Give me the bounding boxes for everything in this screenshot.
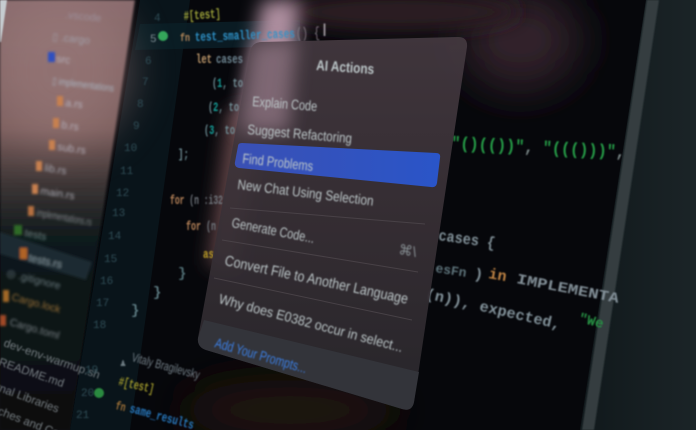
code editor text: } <box>131 303 139 319</box>
line numbers: 11 <box>120 166 134 178</box>
AI Actions popup menu: Add Your Prompts... <box>213 335 309 376</box>
line numbers <box>76 13 161 422</box>
file tree sidebar: ◎ .gitignore <box>5 267 62 292</box>
line numbers: 5 <box>150 34 157 46</box>
line numbers: 15 <box>104 254 117 266</box>
file tree sidebar: sub.rs <box>57 141 87 157</box>
code editor text: "We <box>577 311 605 333</box>
sidebar lower file names <box>0 337 101 430</box>
code editor text: } <box>153 285 161 301</box>
code editor text: fn <box>180 33 190 45</box>
file tree sidebar: tests <box>23 227 47 243</box>
code editor text: as <box>203 247 214 262</box>
code editor text: } <box>178 266 186 282</box>
code editor text: cases <box>216 52 243 67</box>
file tree sidebar: b.rs <box>61 119 80 133</box>
code editor text: esFn ) <box>434 260 484 284</box>
highlighted row <box>235 143 440 187</box>
menu items: Explain Code <box>252 93 318 114</box>
AI Actions popup menu: ⌘\ <box>398 241 418 260</box>
file tree sidebar: main.rs <box>40 185 75 202</box>
menu panel <box>198 37 467 410</box>
code editor text: #[test] <box>117 374 156 397</box>
line numbers: 10 <box>124 143 137 155</box>
code editor text: ♟ <box>120 359 126 370</box>
AI Actions popup menu: Why does E0382 occur in select... <box>217 291 405 355</box>
code editor text: fn <box>114 399 127 415</box>
AI Actions popup menu: Suggest Refactoring <box>247 121 353 146</box>
line numbers: 12 <box>116 188 129 200</box>
code editor text: let <box>196 52 212 67</box>
code editor text: (1, to <box>212 76 243 91</box>
code editor text: Vitaly Bragilevsky <box>130 350 202 382</box>
code editor text: Ⅰ <box>322 23 327 42</box>
menu footer band <box>198 320 419 410</box>
file tree sidebar: lib.rs <box>44 162 67 177</box>
line numbers: 9 <box>133 121 140 133</box>
file tree sidebar: .vscode <box>65 9 102 25</box>
code editor text: test_smaller_cases <box>195 27 295 45</box>
line numbers: 21 <box>76 410 90 422</box>
line numbers: 7 <box>142 77 149 89</box>
file tree sidebar: implementations.rs <box>35 207 93 229</box>
file tree sidebar: src <box>56 53 71 67</box>
line numbers: 16 <box>100 276 113 288</box>
file tree sidebar: ▯ .cargo <box>52 31 91 47</box>
code editor text: in <box>487 266 508 286</box>
code editor text: #[test] <box>183 6 221 24</box>
code editor text: for (n <box>186 219 216 234</box>
file tree sidebar: ▯ implementations <box>52 76 115 95</box>
AI Actions popup menu: Generate Code... <box>230 214 316 246</box>
line numbers: 6 <box>145 56 152 68</box>
line numbers: 19 <box>85 365 98 377</box>
AI Actions popup menu: Find Problems <box>242 150 314 174</box>
AI Actions popup menu: Convert File to Another Language <box>223 253 409 308</box>
file tree sidebar <box>0 9 115 342</box>
file tree sidebar: Cargo.lock <box>10 291 63 316</box>
file tree sidebar: tests.rs <box>27 252 63 271</box>
file tree sidebar: Cargo.toml <box>8 316 61 342</box>
code editor text: ]; <box>178 147 189 162</box>
code editor text: IMPLEMENTA <box>515 272 621 308</box>
code editor text: (2, to <box>208 100 239 115</box>
line numbers: 8 <box>137 99 144 111</box>
line numbers: 17 <box>96 298 109 310</box>
sidebar lower file names: dev-env-warmup.sh <box>2 337 101 382</box>
file tree sidebar: a.rs <box>65 97 83 111</box>
line numbers: 18 <box>93 320 106 332</box>
code editor text: (n)), expected, <box>424 286 562 334</box>
AI Actions popup menu: New Chat Using Selection <box>237 176 375 209</box>
code editor text: (3, to <box>204 123 235 138</box>
AI Actions popup menu <box>198 37 467 410</box>
pink reflection through the menu <box>240 40 296 132</box>
code editor text: cases { <box>437 227 496 253</box>
line numbers: 4 <box>154 13 161 25</box>
code editor text: for (n :i32 <box>170 193 223 208</box>
menu title: AI Actions <box>316 58 375 78</box>
code editor text <box>94 6 625 430</box>
code editor text: "()(())", "((()))", <box>451 135 625 163</box>
line numbers: 13 <box>112 208 125 220</box>
code editor text: () { <box>296 25 320 43</box>
line numbers: 14 <box>108 231 122 243</box>
line numbers: 20 <box>81 388 94 400</box>
